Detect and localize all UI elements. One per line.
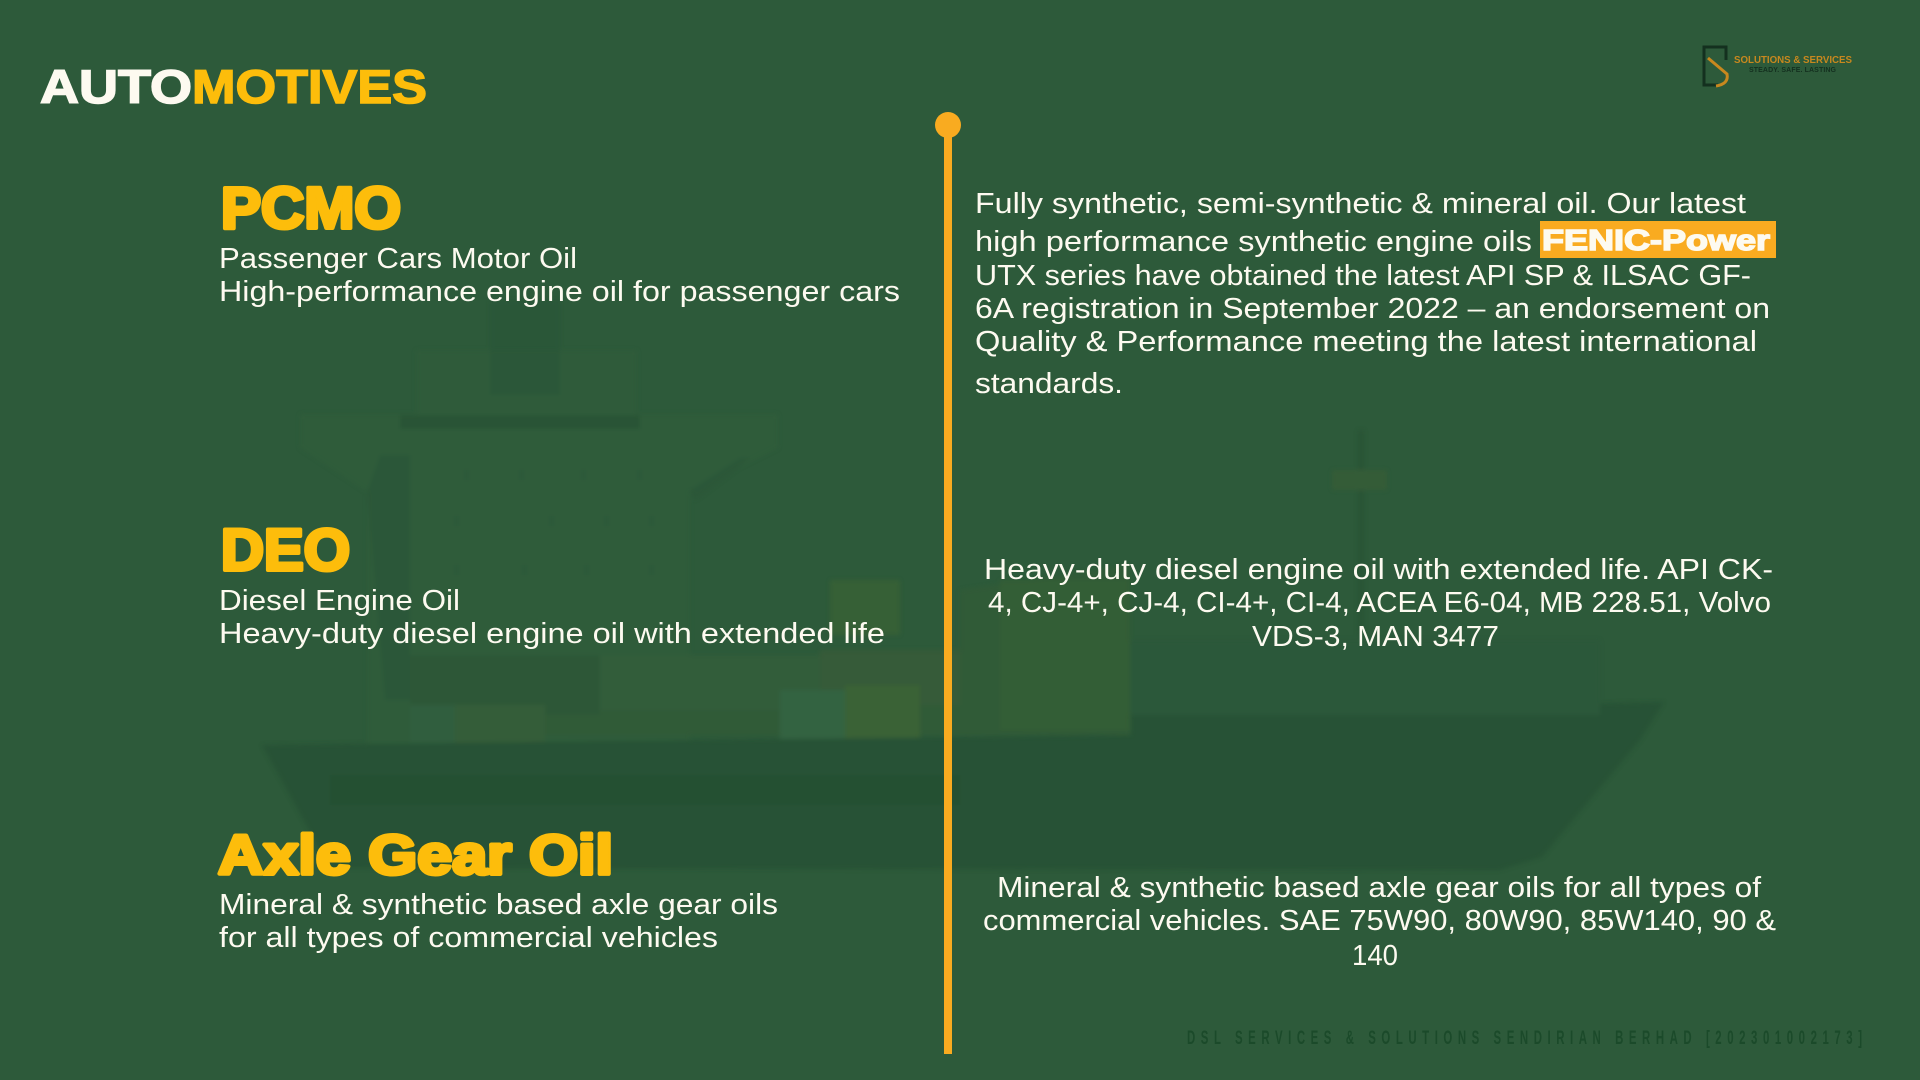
section: Axle Gear Oil: Axle Gear Oil: [218, 823, 613, 886]
description: Axle Gear Oil: commercial vehicles. SAE 75W90, 80W90, 85W140, 90 &: [983, 905, 1776, 937]
background: faded container ship: [262, 300, 1664, 870]
description: Axle Gear Oil: Mineral & synthetic based axle gear oils for all types of: [997, 872, 1762, 904]
timeline line with pin: [935, 112, 961, 1054]
title: [40, 60, 427, 113]
description: DEO: VDS-3, MAN 3477: [1252, 621, 1499, 653]
section: PCMO: High-performance engine oil for passenger cars: [219, 276, 900, 308]
section: Axle Gear Oil: [218, 823, 778, 954]
section: DEO: DEO: [221, 518, 350, 583]
description: PCMO: 6A registration in September 2022 – an endorsement on: [975, 293, 1770, 325]
description: PCMO: Quality & Performance meeting the latest international: [975, 326, 1757, 358]
section: Axle Gear Oil: Mineral & synthetic based axle gear oils: [219, 889, 778, 921]
description: PCMO: FENIC-Power: [1542, 225, 1770, 257]
section: PCMO: Passenger Cars Motor Oil: [219, 243, 577, 275]
title: MOTIVES: [192, 60, 427, 113]
logo: [1704, 47, 1852, 86]
logo: SOLUTIONS & SERVICES: [1734, 55, 1852, 66]
description: PCMO: [975, 188, 1776, 400]
section: DEO: [219, 518, 885, 650]
description: PCMO: standards.: [975, 368, 1123, 400]
description: PCMO: UTX series have obtained the latest API SP & ILSAC GF-: [975, 260, 1751, 292]
title: AUTO: [40, 60, 192, 113]
description: DEO: 4, CJ-4+, CJ-4, CI-4+, CI-4, ACEA E6-04, MB 228.51, Volvo: [988, 587, 1771, 619]
section: PCMO: PCMO: [221, 176, 401, 241]
description: Axle Gear Oil: 140: [1352, 940, 1398, 972]
description: DEO: [984, 554, 1773, 653]
description: PCMO: Fully synthetic, semi-synthetic & mineral oil. Our latest: [975, 188, 1746, 220]
section: Axle Gear Oil: for all types of commercial vehicles: [219, 922, 718, 954]
section: DEO: Diesel Engine Oil: [219, 585, 460, 617]
description: PCMO: high performance synthetic engine oils: [975, 226, 1532, 258]
section: PCMO: [219, 176, 900, 308]
description: DEO: Heavy-duty diesel engine oil with extended life. API CK-: [984, 554, 1773, 586]
description: Axle Gear Oil: [983, 872, 1776, 972]
section: DEO: Heavy-duty diesel engine oil with extended life: [219, 618, 885, 650]
logo: STEADY. SAFE. LASTING: [1749, 67, 1837, 74]
footer company registration: DSL SERVICES & SOLUTIONS SENDIRIAN BERHAD [202301002173]: [1187, 1028, 1862, 1049]
